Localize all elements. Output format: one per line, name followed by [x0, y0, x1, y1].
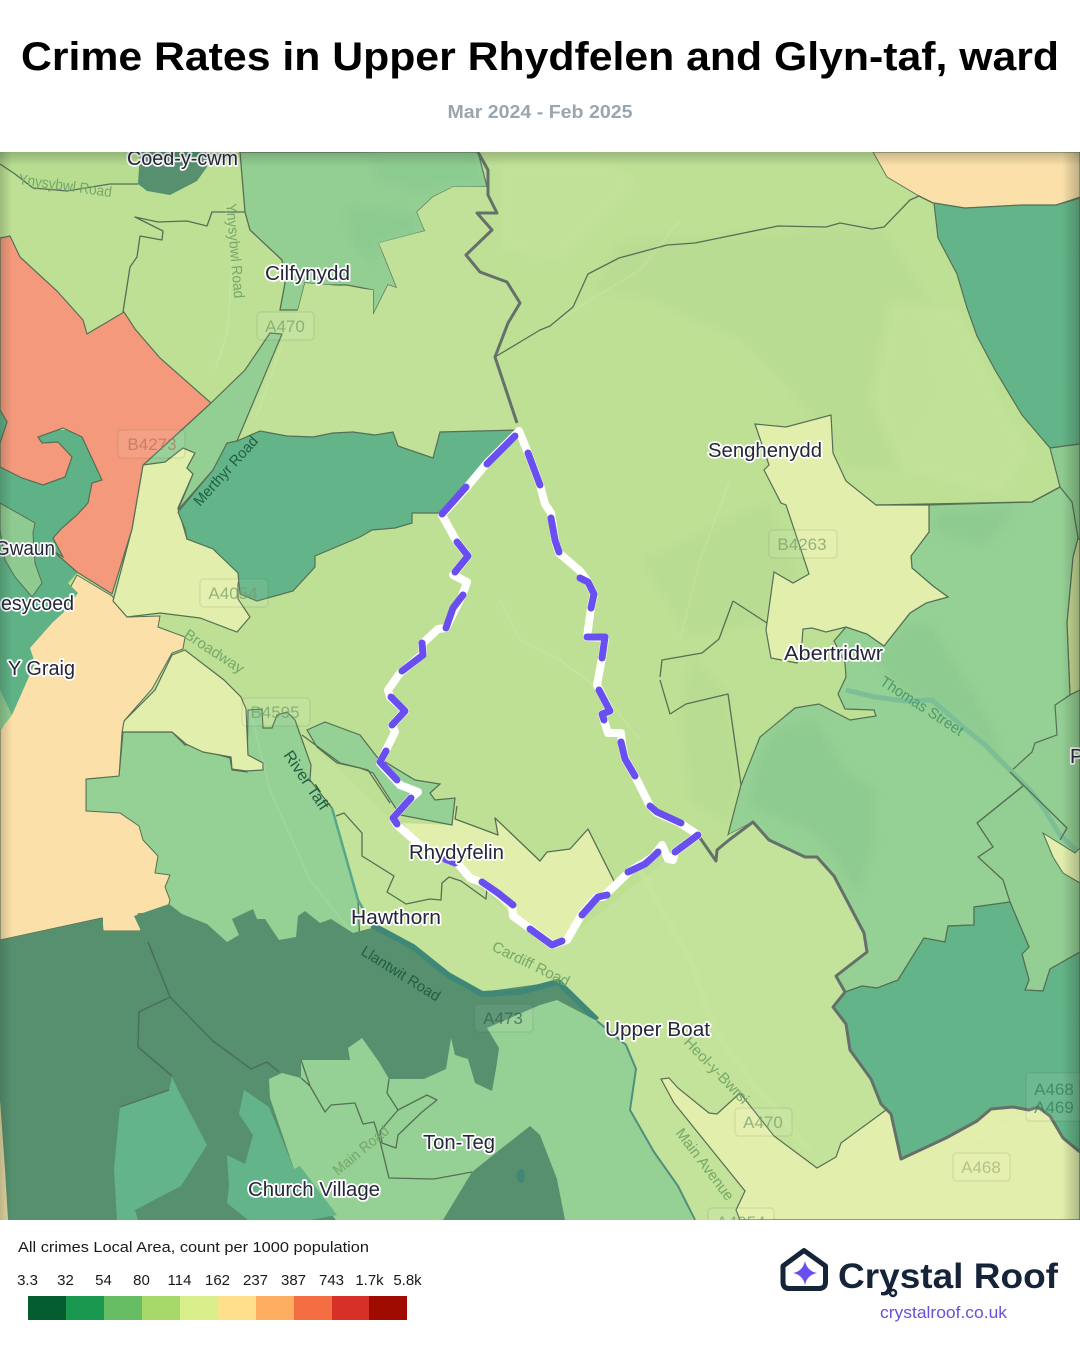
terrain shading inside Cilfynydd [370, 152, 486, 252]
place name labels [0, 148, 1080, 1201]
peach sliver at bottom-left [0, 1100, 8, 1220]
terrain shading: lighter hill patches [881, 353, 890, 404]
legend scale values: 162 [205, 1272, 230, 1289]
region: green Merthyr Road blob [178, 430, 519, 601]
region: dark green south-west [0, 904, 597, 1220]
legend scale values [17, 1272, 422, 1289]
road name labels: Ynysybwl Road [222, 203, 247, 299]
road name labels: Merthyr Road [190, 433, 262, 510]
road name labels [17, 171, 967, 1204]
terrain shading inside Abertridwr hills [768, 504, 986, 731]
road number tags [118, 312, 1080, 1236]
place name labels: esycoed [1, 593, 74, 615]
region: mid-west Ynysybwl hill [0, 152, 285, 403]
pond [517, 1169, 525, 1183]
region: green west of salmon [0, 410, 110, 730]
region: pale yellow Broadway [122, 650, 263, 771]
road name labels: Main Road [330, 1122, 393, 1179]
road number tags: A4054 [716, 1213, 766, 1232]
website link text: crystalroof.co.uk [880, 1304, 1008, 1322]
region: peach south-west [0, 575, 185, 940]
small mid green sliver [0, 690, 12, 730]
road number tags: A4054 [208, 584, 258, 603]
road name labels: Thomas Street [877, 673, 967, 740]
road name labels: Broadway [181, 626, 248, 678]
place name labels: Upper Boat [605, 1019, 710, 1041]
map edge vignette [0, 152, 1080, 1220]
place name labels: Hawthorn [351, 907, 441, 929]
faint boundaries in dark green [138, 942, 279, 1076]
region: river Taff mid green [86, 709, 360, 945]
region: green south-east [833, 902, 1080, 1159]
road number tags: B4263 [777, 535, 827, 554]
legend scale values: 237 [243, 1272, 268, 1289]
region: top-left strip [0, 152, 245, 212]
road name labels: Heol-y-Bwrsi [680, 1034, 752, 1108]
legend scale values: 387 [281, 1272, 306, 1289]
logo icon: house with star [783, 1250, 826, 1288]
road name labels: River Taff [280, 748, 332, 814]
legend scale values: 114 [168, 1272, 191, 1289]
place name labels: Cilfynydd [265, 263, 350, 285]
place name labels: Ton-Teg [423, 1132, 495, 1154]
logo wordmark: Crystal Roof [838, 1257, 1058, 1296]
small mid green insets at left [0, 503, 42, 597]
region: light area right of Cilfynydd [298, 187, 486, 316]
place name labels: Y Graig [8, 658, 75, 680]
legend scale values: 743 [319, 1272, 344, 1289]
river edge by Upper Boat [597, 1021, 695, 1220]
region: salmon high-crime area [0, 236, 211, 594]
road name labels: Llantwit Road [358, 943, 443, 1005]
legend scale values: 5.8k [393, 1272, 422, 1289]
place name labels: Abertridwr [784, 643, 883, 665]
road number tags: A468 [1034, 1080, 1074, 1099]
road number tags: A468 [961, 1158, 1001, 1177]
region: green Church Village [227, 1090, 337, 1220]
region: right upper hill [466, 152, 1060, 861]
place name labels: Senghenydd [708, 440, 822, 462]
region: pale yellow south-east [661, 1078, 1080, 1220]
road name labels: Cardiff Road [489, 938, 572, 990]
boundary lines between districts [0, 164, 1067, 1179]
legend scale values: 3.3 [17, 1272, 38, 1289]
region: green north-east [934, 198, 1080, 448]
region: pale east wedge [1043, 833, 1080, 883]
road number tags: B4595 [250, 703, 300, 722]
region: east small strip [1050, 444, 1080, 540]
subtitle: date range: Mar 2024 - Feb 2025 [448, 101, 632, 122]
region: pale yellow inside ward at Rhydyfelin [403, 806, 615, 945]
road number tags: A470 [265, 317, 305, 336]
region: mid green Rhydyfelin patch [307, 722, 455, 825]
region: pale yellow A4054 [113, 448, 250, 632]
river: Taff dark band [372, 925, 597, 1020]
legend colour scale [28, 1296, 407, 1320]
river: Taff edge [332, 808, 372, 925]
ward boundary: white outline with purple dashes [380, 431, 698, 945]
region: mid green Merthyr strip [143, 333, 282, 510]
terrain: A470 road band [640, 870, 810, 1150]
region: Cilfynydd mid green [240, 152, 487, 315]
road name labels: Ynysybwl Road [17, 171, 113, 201]
region: lower valley Upper Boat [728, 826, 745, 836]
region: green west of Church Village [114, 1077, 207, 1220]
legend title: All crimes Local Area, count per 1000 population [18, 1239, 369, 1256]
region: dark green triangle [443, 1126, 565, 1220]
terrain shading: hill patches [590, 225, 950, 825]
road number tags: B4273 [127, 435, 177, 454]
legend scale values: 80 [133, 1272, 150, 1289]
region: big mid green Abertridwr hills [728, 487, 1078, 992]
region: Coed-y-cwm dark patch [138, 152, 208, 195]
place name labels: Coed-y-cwm [127, 148, 238, 170]
legend scale values: 32 [57, 1272, 74, 1289]
faint roads [215, 205, 1040, 1210]
region: peach north-east corner [873, 152, 1080, 208]
road number tags: A470 [743, 1113, 783, 1132]
place name labels: Church Village [248, 1179, 380, 1201]
county thick boundary north [466, 152, 520, 423]
region: far east olive strip [1067, 538, 1080, 695]
road number tags: A469 [1034, 1098, 1074, 1117]
road number tags: A473 [483, 1009, 523, 1028]
river: Thomas Street stream [846, 690, 1076, 850]
title: Crime Rates in Upper Rhydfelen and Glyn-taf, ward [21, 35, 1059, 79]
road name labels: Main Avenue [672, 1125, 737, 1204]
region: Senghenydd pale yellow [755, 415, 948, 663]
region: east mid green lower [977, 690, 1080, 991]
place name labels: Rhydyfelin [409, 842, 504, 864]
region: mid green Ton-Teg [269, 1000, 693, 1220]
legend scale values: 1.7k [355, 1272, 384, 1289]
county thick boundary south-east [698, 822, 1080, 1159]
legend scale values: 54 [95, 1272, 112, 1289]
